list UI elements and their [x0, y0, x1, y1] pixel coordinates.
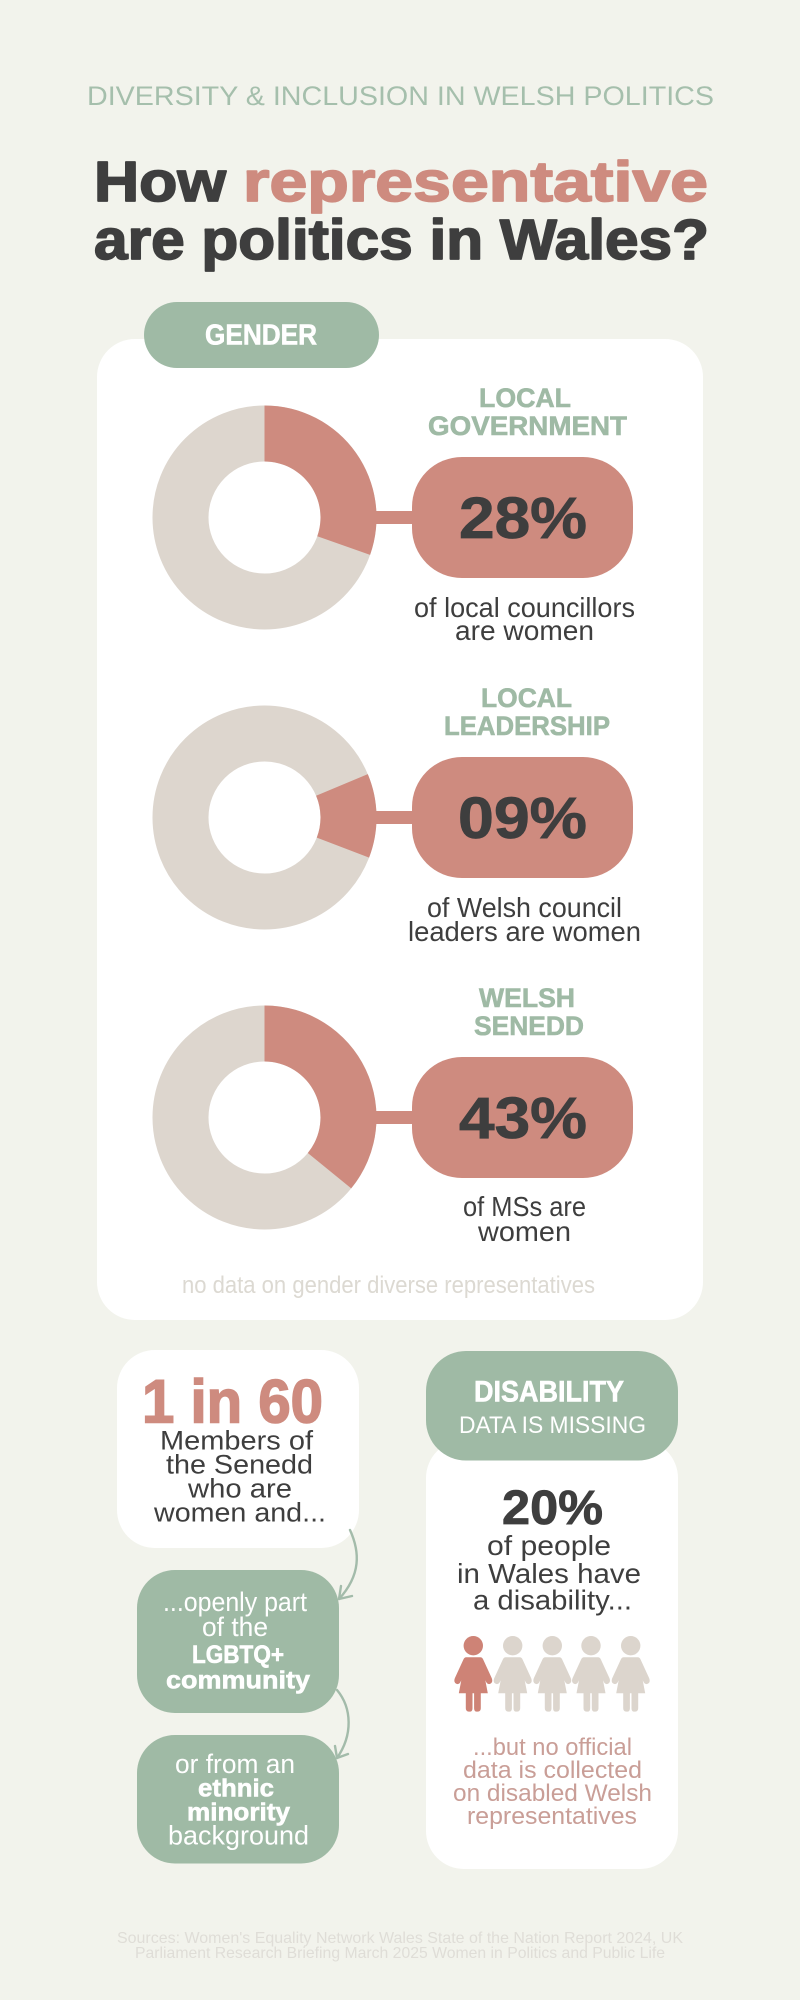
panel: ethnic minority: background: [168, 1820, 309, 1850]
subtitle: DIVERSITY & INCLUSION IN WELSH POLITICS: [87, 81, 714, 111]
heading: local government: [428, 383, 628, 441]
text: local councillors: [414, 592, 635, 646]
heading: local leadership: LEADERSHIP: [444, 711, 610, 741]
panel: ethnic minority: minority: [187, 1798, 290, 1826]
note: gender diverse data: no data on gender diverse representatives: [182, 1272, 595, 1299]
heading: local leadership: LOCAL: [481, 683, 572, 713]
callout: 28%: [375, 457, 633, 578]
panel: LGBTQ+: community: [166, 1666, 310, 1694]
arrow: 1 in 60 to LGBTQ+: [339, 1530, 357, 1599]
text: no official data: [453, 1734, 652, 1830]
donut chart: 28% local government: [180, 406, 377, 602]
text: people with a disability: of people: [487, 1530, 611, 1561]
text: council leaders: of Welsh council: [427, 892, 622, 923]
heading: local leadership: [444, 683, 610, 741]
text: council leaders: leaders are women: [408, 916, 641, 947]
panel: LGBTQ+: [137, 1570, 339, 1713]
panel: 1 in 60: [117, 1350, 359, 1548]
panel: LGBTQ+: of the: [202, 1612, 268, 1642]
text: members of the senedd: [153, 1426, 326, 1528]
text: MSs: [463, 1191, 586, 1247]
callout: 28%: 28%: [459, 486, 587, 551]
text: members of the senedd: the Senedd: [166, 1450, 313, 1480]
callout: 09%: 09%: [458, 786, 587, 851]
big stat: 20%: 20%: [502, 1482, 603, 1535]
panel: gender: [97, 302, 703, 1320]
sources: [117, 1930, 683, 1962]
disability heading pill: [426, 1351, 678, 1460]
text: local councillors: are women: [455, 615, 594, 646]
disability heading pill: DATA IS MISSING: [459, 1412, 646, 1439]
text: no official data: ...but no official: [473, 1734, 632, 1761]
heading: local government: LOCAL: [479, 383, 571, 413]
panel: ethnic minority: ethnic: [198, 1774, 274, 1802]
panel: LGBTQ+: LGBTQ+: [192, 1641, 284, 1669]
icons: one in five people: [454, 1636, 650, 1712]
text: members of the senedd: women and...: [153, 1498, 326, 1528]
heading: welsh senedd: SENEDD: [474, 1011, 584, 1041]
donut chart: 43% welsh senedd: [180, 1006, 376, 1202]
text: people with a disability: [457, 1530, 641, 1616]
text: MSs: women: [477, 1216, 571, 1247]
callout: 43%: 43%: [459, 1086, 587, 1151]
gender heading pill: GENDER: [205, 320, 317, 352]
text: no official data: data is collected: [463, 1757, 642, 1784]
text: members of the senedd: who are: [187, 1474, 292, 1504]
callout: 43%: [375, 1057, 633, 1178]
big stat: 1 in 60: 1 in 60: [142, 1368, 323, 1436]
title: are politics in Wales?: [94, 208, 709, 272]
text: no official data: representatives: [467, 1803, 637, 1830]
text: no official data: on disabled Welsh: [453, 1780, 652, 1807]
text: people with a disability: a disability...: [473, 1584, 632, 1616]
title: representative: [243, 150, 708, 214]
heading: welsh senedd: WELSH: [479, 983, 575, 1013]
heading: local government: GOVERNMENT: [428, 411, 628, 441]
disability heading pill: DISABILITY: [474, 1376, 624, 1408]
heading: welsh senedd: [474, 983, 584, 1041]
panel: ethnic minority: or from an: [175, 1749, 295, 1779]
text: council leaders: [408, 892, 641, 947]
panel: LGBTQ+: ...openly part: [163, 1587, 307, 1617]
text: people with a disability: in Wales have: [457, 1558, 641, 1589]
sources: Parliament Research Briefing March 2025 Women in Politics and Public Life: [135, 1945, 665, 1962]
panel: ethnic minority: [137, 1735, 339, 1864]
arrow: LGBTQ+ to ethnic minority: [335, 1690, 349, 1758]
panel: disability: [426, 1351, 678, 1869]
text: local councillors: of local councillors: [414, 592, 635, 623]
title: [94, 150, 709, 272]
text: MSs: of MSs are: [463, 1191, 586, 1222]
text: members of the senedd: Members of: [160, 1426, 314, 1456]
sources: Sources: Women's Equality Network Wales State of the Nation Report 2024, UK: [117, 1930, 683, 1947]
donut chart: 9% local leadership: [180, 734, 377, 902]
title: How: [94, 150, 227, 214]
callout: 09%: [375, 757, 633, 878]
gender heading pill: [144, 302, 379, 368]
